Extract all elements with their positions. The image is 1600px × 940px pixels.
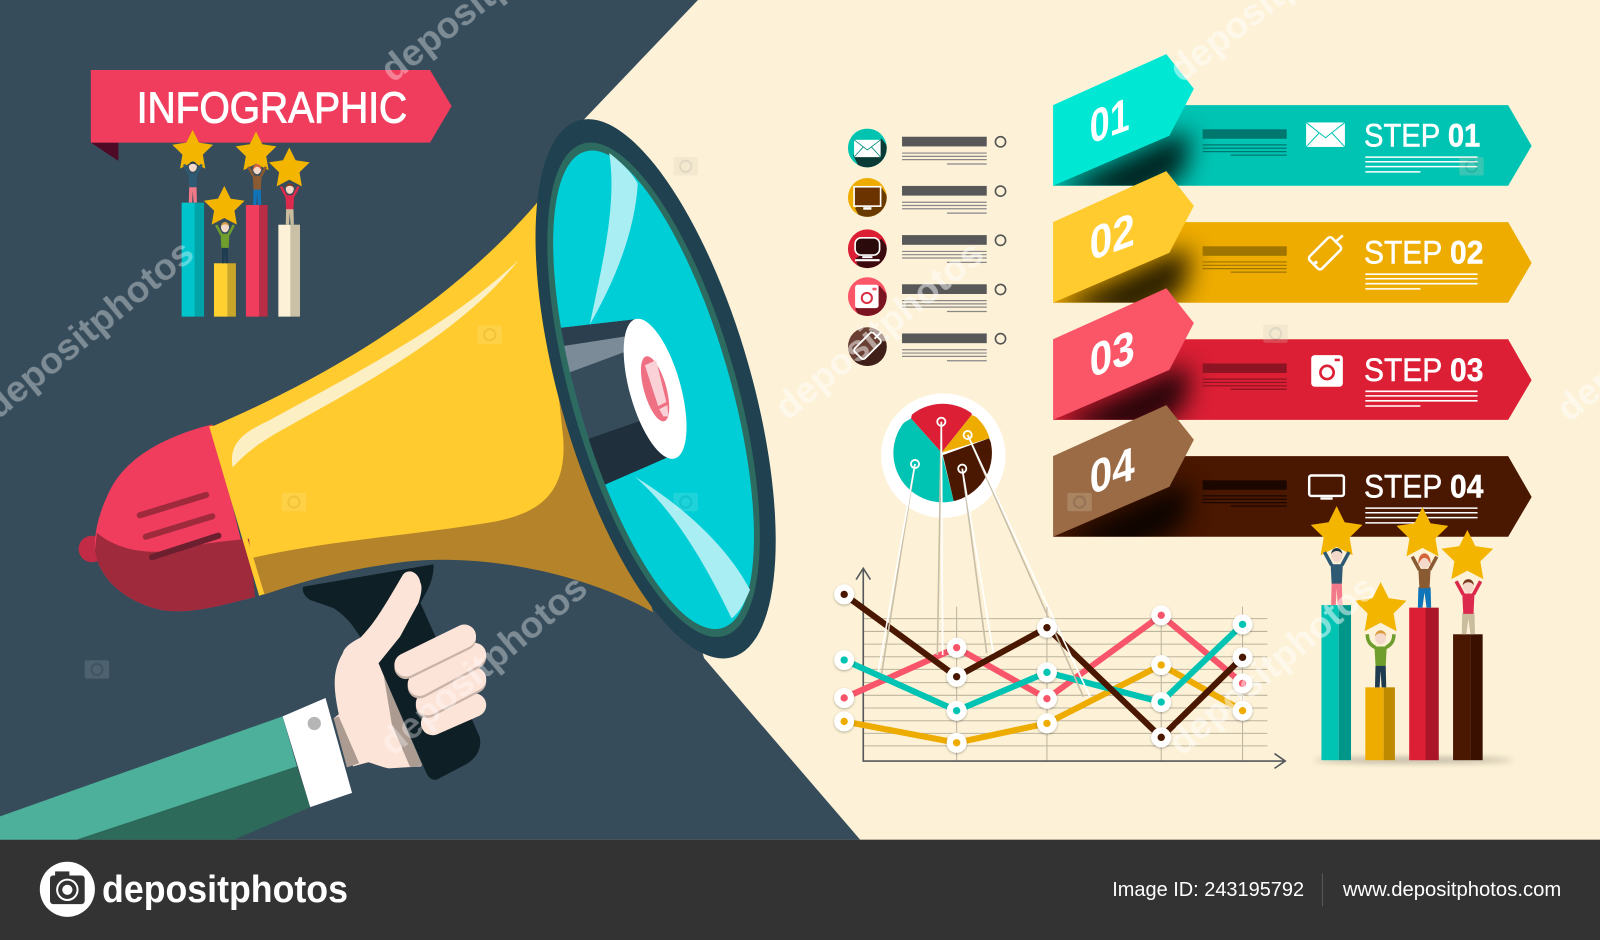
person 2 xyxy=(1367,630,1394,687)
step 04: 04 xyxy=(1090,437,1135,506)
list item 1 xyxy=(848,128,1006,168)
large bar chart with people and stars xyxy=(1311,506,1513,763)
icon: camera xyxy=(848,277,887,316)
watermarks: depositphotos xyxy=(1160,567,1384,763)
icon: monitor xyxy=(848,178,887,217)
list item 3 xyxy=(848,229,1006,268)
website: www.depositphotos.com xyxy=(1342,879,1561,901)
series brown xyxy=(844,594,1243,737)
megaphone with hand xyxy=(0,94,825,840)
step 03 xyxy=(1053,288,1532,420)
stars xyxy=(172,130,310,225)
pie chart xyxy=(878,388,1006,520)
icon list xyxy=(848,129,1006,372)
list item 2 xyxy=(848,178,1006,217)
step 03: 03 xyxy=(1090,320,1135,389)
step 02: 02 xyxy=(1090,203,1135,272)
icon: monitor xyxy=(1309,476,1344,498)
step 01: 01 xyxy=(1090,88,1130,155)
series teal xyxy=(844,624,1243,711)
person 1 xyxy=(184,162,202,203)
pie connector lines xyxy=(878,418,1090,697)
step 01 xyxy=(1053,54,1532,186)
footer logo icon xyxy=(40,862,95,917)
step 01: STEP 01 xyxy=(1364,118,1480,154)
person 4 xyxy=(1456,579,1481,634)
hand xyxy=(334,571,474,768)
bar 4 cream xyxy=(278,225,300,317)
list item 5 xyxy=(848,327,1006,366)
person 2 xyxy=(216,222,234,263)
line chart xyxy=(834,418,1285,768)
step ribbons xyxy=(1053,54,1532,555)
footer logo text: depositphotos xyxy=(102,868,348,910)
megaphone back xyxy=(79,424,264,611)
icon: camera xyxy=(1311,355,1343,387)
bar 2 yellow xyxy=(1365,687,1395,760)
icon: phone xyxy=(848,327,887,366)
chart axes xyxy=(856,568,1285,768)
bar 3 red xyxy=(1409,608,1439,760)
arm sleeve xyxy=(0,716,310,840)
bar 1 teal xyxy=(1321,605,1351,760)
dark diagonal panel xyxy=(0,0,860,840)
step 04 xyxy=(1053,405,1532,537)
icon: phone xyxy=(1308,235,1343,271)
speaker cone xyxy=(561,318,687,484)
title banner: INFOGRAPHIC xyxy=(137,83,407,132)
bar 2 yellow xyxy=(214,263,236,317)
icon: envelope xyxy=(848,128,887,168)
shirt cuff xyxy=(283,698,352,807)
step 03: STEP 03 xyxy=(1364,352,1483,388)
step 02: STEP 02 xyxy=(1364,235,1483,271)
megaphone handle xyxy=(303,564,480,780)
series yellow xyxy=(844,665,1243,743)
small bar chart with people and stars xyxy=(172,130,310,317)
watermarks: depositphotos xyxy=(767,232,991,428)
icon: envelope xyxy=(1306,122,1345,147)
bar 3 red xyxy=(246,205,268,317)
icon: computer xyxy=(848,229,887,268)
person 4 xyxy=(281,184,299,225)
person 3 xyxy=(248,164,266,205)
person 1 xyxy=(1324,548,1349,605)
watermarks: depositphotos xyxy=(372,567,595,763)
chart nodes xyxy=(834,584,1253,753)
footer bar xyxy=(0,840,1600,940)
series pink xyxy=(844,615,1243,699)
list item 4 xyxy=(848,277,1006,316)
chart grid xyxy=(863,607,1267,761)
stars xyxy=(1311,506,1493,631)
megaphone mouth xyxy=(536,119,776,658)
bar 1 teal xyxy=(182,203,204,317)
person 3 xyxy=(1412,553,1437,608)
step 04: STEP 04 xyxy=(1364,469,1483,505)
image id: Image ID: 243195792 xyxy=(1112,879,1304,901)
megaphone horn xyxy=(212,202,653,612)
title banner xyxy=(91,70,452,161)
bar 4 brown xyxy=(1453,634,1483,760)
step 02 xyxy=(1053,171,1532,303)
